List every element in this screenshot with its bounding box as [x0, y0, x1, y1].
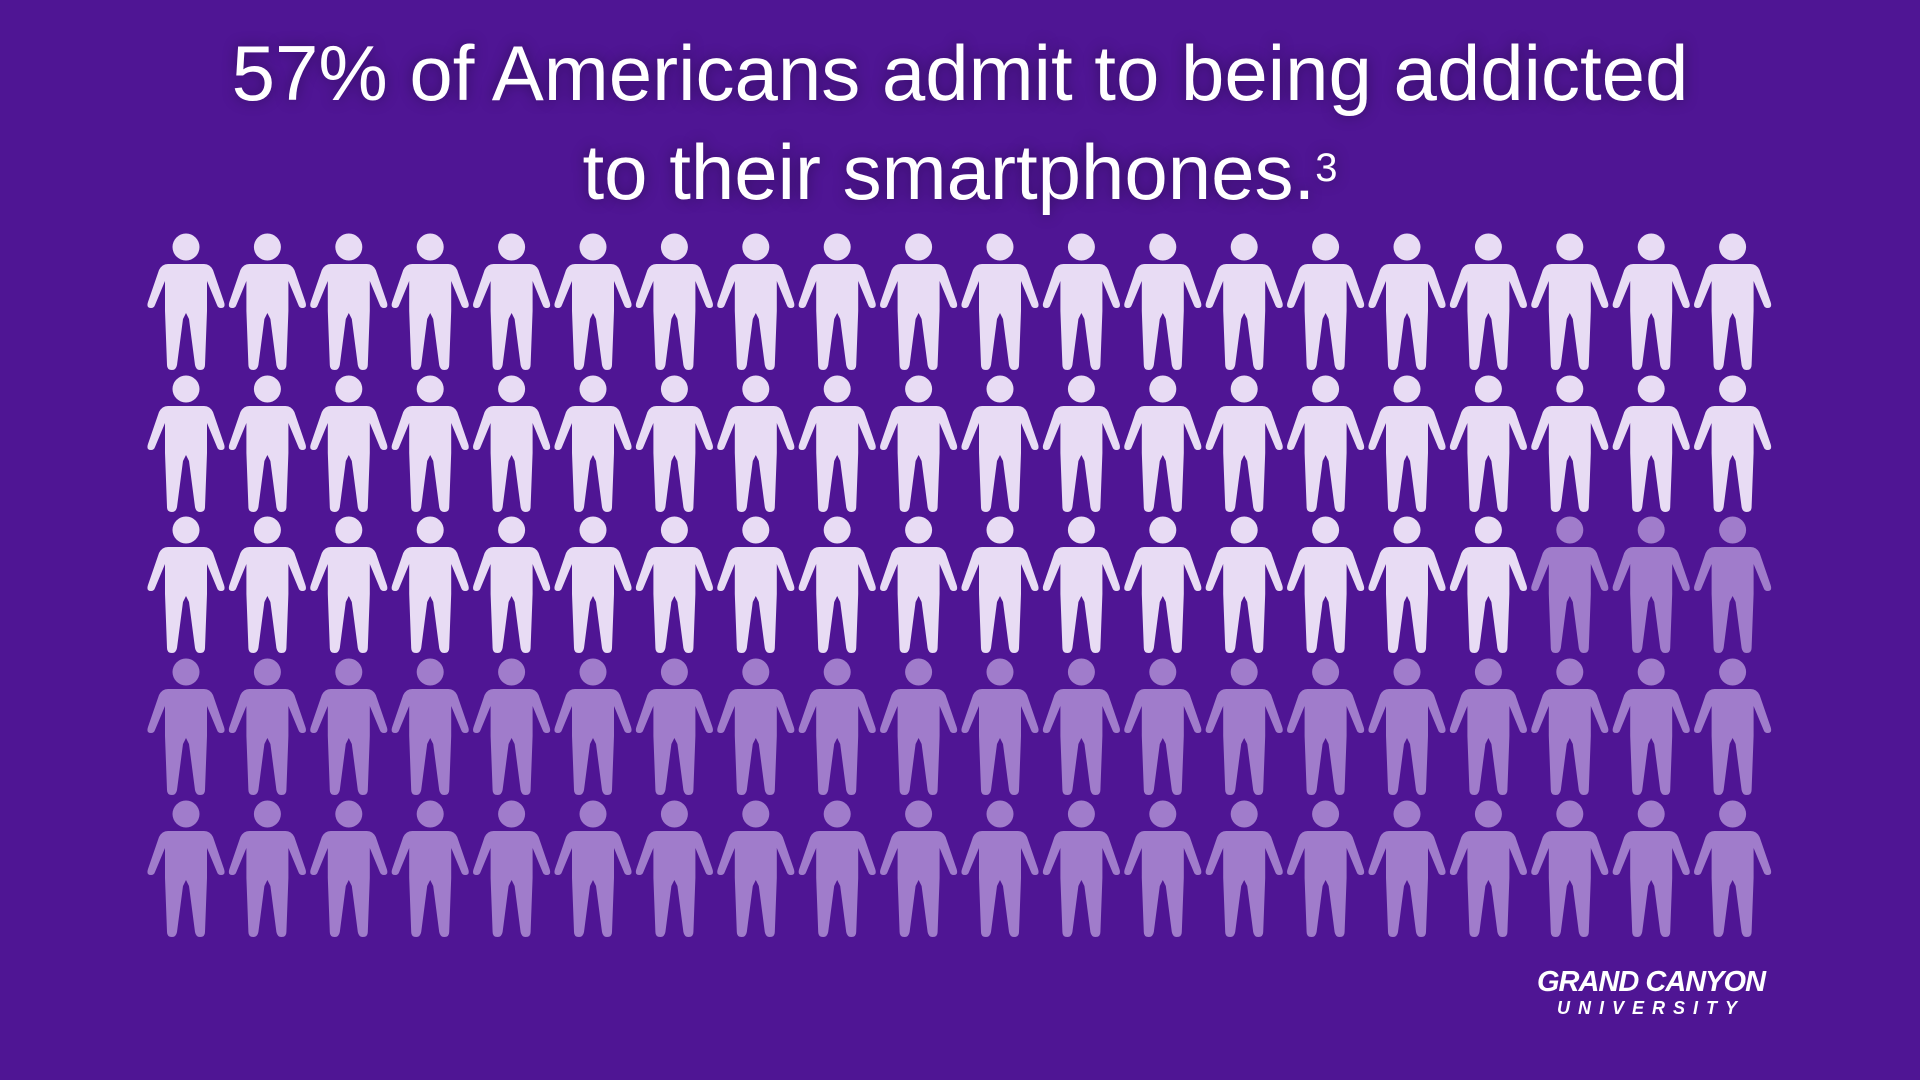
- logo: Grand Canyon University: UNIVERSITY: [1557, 998, 1745, 1018]
- title: [231, 29, 1690, 216]
- title: to their smartphones.3: [583, 128, 1337, 216]
- logo: Grand Canyon University: GRAND CANYON: [1537, 966, 1765, 998]
- row 1: [147, 234, 1771, 370]
- logo: Grand Canyon University: [1537, 966, 1767, 1018]
- row 4: [147, 658, 1771, 795]
- row 5: [147, 800, 1771, 937]
- row 3: [147, 516, 1771, 653]
- row 2: [147, 376, 1771, 512]
- title: 57% of Americans admit to being addicted: [232, 29, 1688, 117]
